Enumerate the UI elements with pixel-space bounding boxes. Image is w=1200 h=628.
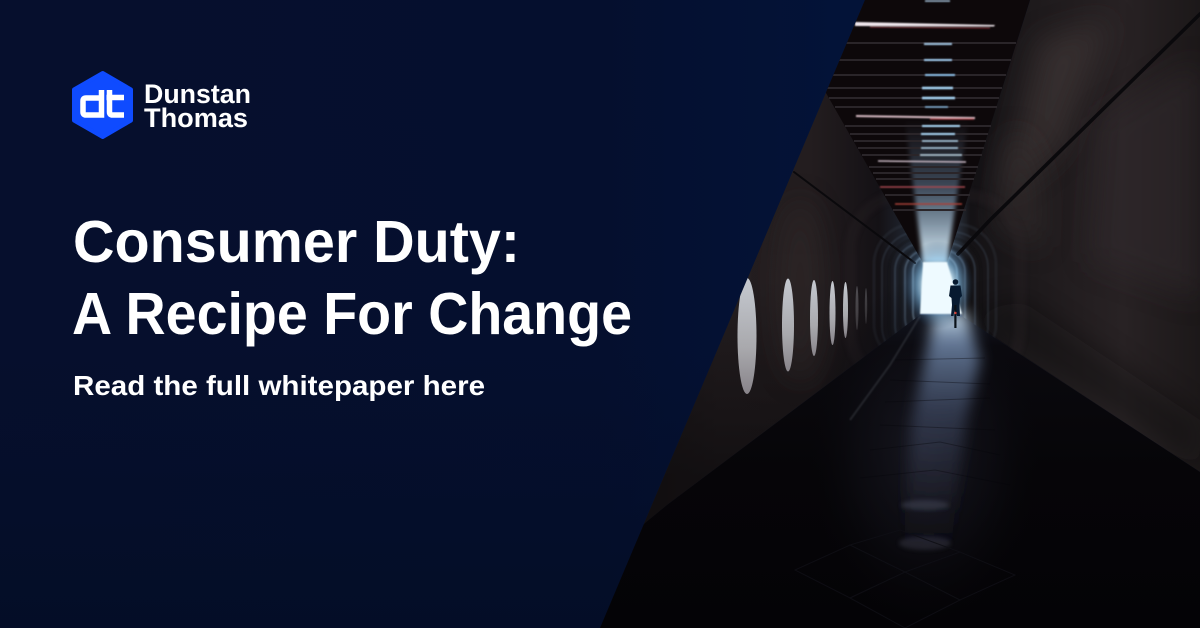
title: A Recipe For Change [72, 281, 632, 347]
left tunnel wall [644, 93, 922, 524]
wall seam lines [794, 14, 1200, 263]
wordmark: Thomas [144, 103, 248, 133]
tunnel floor [600, 280, 1200, 628]
wordmark [144, 79, 251, 133]
logo [74, 73, 251, 137]
ceiling light reflections [855, 1, 995, 204]
icon: dt hexagon [74, 73, 131, 137]
right tunnel wall [945, 0, 1200, 472]
subtitle: Read the full whitepaper here [73, 370, 485, 401]
ceiling slats [828, 42, 1016, 211]
ceiling channel [826, 0, 1030, 264]
light at the end of the tunnel [906, 243, 972, 326]
oval windows [738, 278, 867, 394]
tunnel arch rings [872, 224, 998, 345]
cyclist silhouette [949, 279, 962, 328]
wordmark: Dunstan [144, 79, 251, 109]
title: Consumer Duty: [73, 209, 520, 275]
tunnel photo [600, 0, 1200, 628]
title [72, 209, 632, 347]
